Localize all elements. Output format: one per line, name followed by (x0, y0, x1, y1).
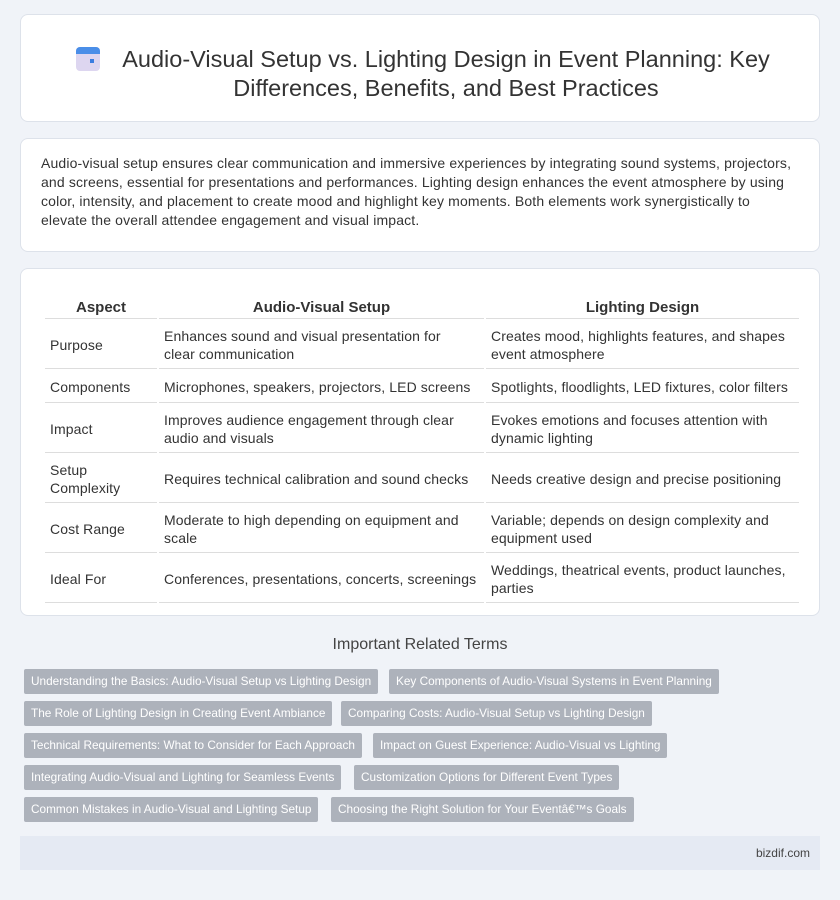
comparison table: Conferences, presentations, concerts, screenings (164, 570, 476, 586)
comparison table: Creates mood, highlights features, and shapes event atmosphere (491, 328, 785, 362)
tags: related terms: Integrating Audio-Visual and Lighting for Seamless Events (31, 770, 334, 784)
comparison table: Evokes emotions and focuses attention with dynamic lighting (491, 412, 768, 446)
tags: related terms: Choosing the Right Solution for Your Eventâ€™s Goals (338, 802, 627, 816)
intro text panel (20, 138, 820, 252)
tags: related terms: Key Components of Audio-Visual Systems in Event Planning (396, 674, 712, 688)
heading: related terms: Important Related Terms (333, 636, 507, 653)
header card (20, 14, 820, 122)
comparison table: Lighting Design (586, 299, 699, 316)
tags: related terms: Understanding the Basics: Audio-Visual Setup vs Lighting Design (31, 674, 371, 688)
comparison table: Requires technical calibration and sound checks (164, 470, 468, 486)
comparison table: clear communication (164, 346, 294, 362)
comparison table: Setup Complexity (50, 462, 120, 496)
tags: related terms: Technical Requirements: What to Consider for Each Approach (31, 738, 355, 752)
comparison table: Ideal For (50, 570, 106, 586)
comparison table: Aspect (76, 299, 126, 316)
comparison table: Cost Range (50, 520, 125, 536)
comparison table: Variable; depends on design complexity and equipment used (491, 512, 769, 546)
comparison table: Weddings, theatrical events, product launches, parties (491, 562, 786, 596)
title: Audio-Visual Setup vs. Lighting Design in Event Planning: Key Differences, Benefits, and Best Practices (122, 46, 770, 101)
tags: related terms: Comparing Costs: Audio-Visual Setup vs Lighting Design (348, 706, 645, 720)
tags: related terms: Impact on Guest Experience: Audio-Visual vs Lighting (380, 738, 660, 752)
comparison table: Microphones, speakers, projectors, LED screens (164, 378, 471, 394)
footer (20, 836, 820, 870)
comparison table: Impact (50, 420, 93, 436)
comparison table: Moderate to high depending on equipment and scale (164, 512, 459, 546)
intro text panel: Audio-visual setup ensures clear communication and immersive experiences by integrating sound systems, projectors, and screens, essential for presentations and performances. Lighting design enhances the event atmosphere by using color, intensity, and placement to create mood and highlight key moments. Both elements work synergistically to elevate the overall attendee engagement and visual impact. (41, 155, 791, 228)
comparison table: Purpose (50, 336, 103, 352)
comparison table: Enhances sound and visual presentation for (164, 328, 441, 344)
comparison table (45, 299, 799, 603)
tags: related terms: Customization Options for Different Event Types (361, 770, 612, 784)
comparison table: Needs creative design and precise positioning (491, 470, 781, 486)
footer: bizdif.com (756, 846, 810, 860)
tags: related terms: Common Mistakes in Audio-Visual and Lighting Setup (31, 802, 311, 816)
comparison table: Audio-Visual Setup (253, 299, 390, 316)
comparison table: Spotlights, floodlights, LED fixtures, color filters (491, 378, 788, 394)
icon: calendar (76, 47, 100, 71)
tags: related terms: The Role of Lighting Design in Creating Event Ambiance (31, 706, 325, 720)
comparison table: Components (50, 378, 130, 394)
comparison table panel (20, 268, 820, 616)
comparison table: Improves audience engagement through clear audio and visuals (164, 412, 454, 446)
